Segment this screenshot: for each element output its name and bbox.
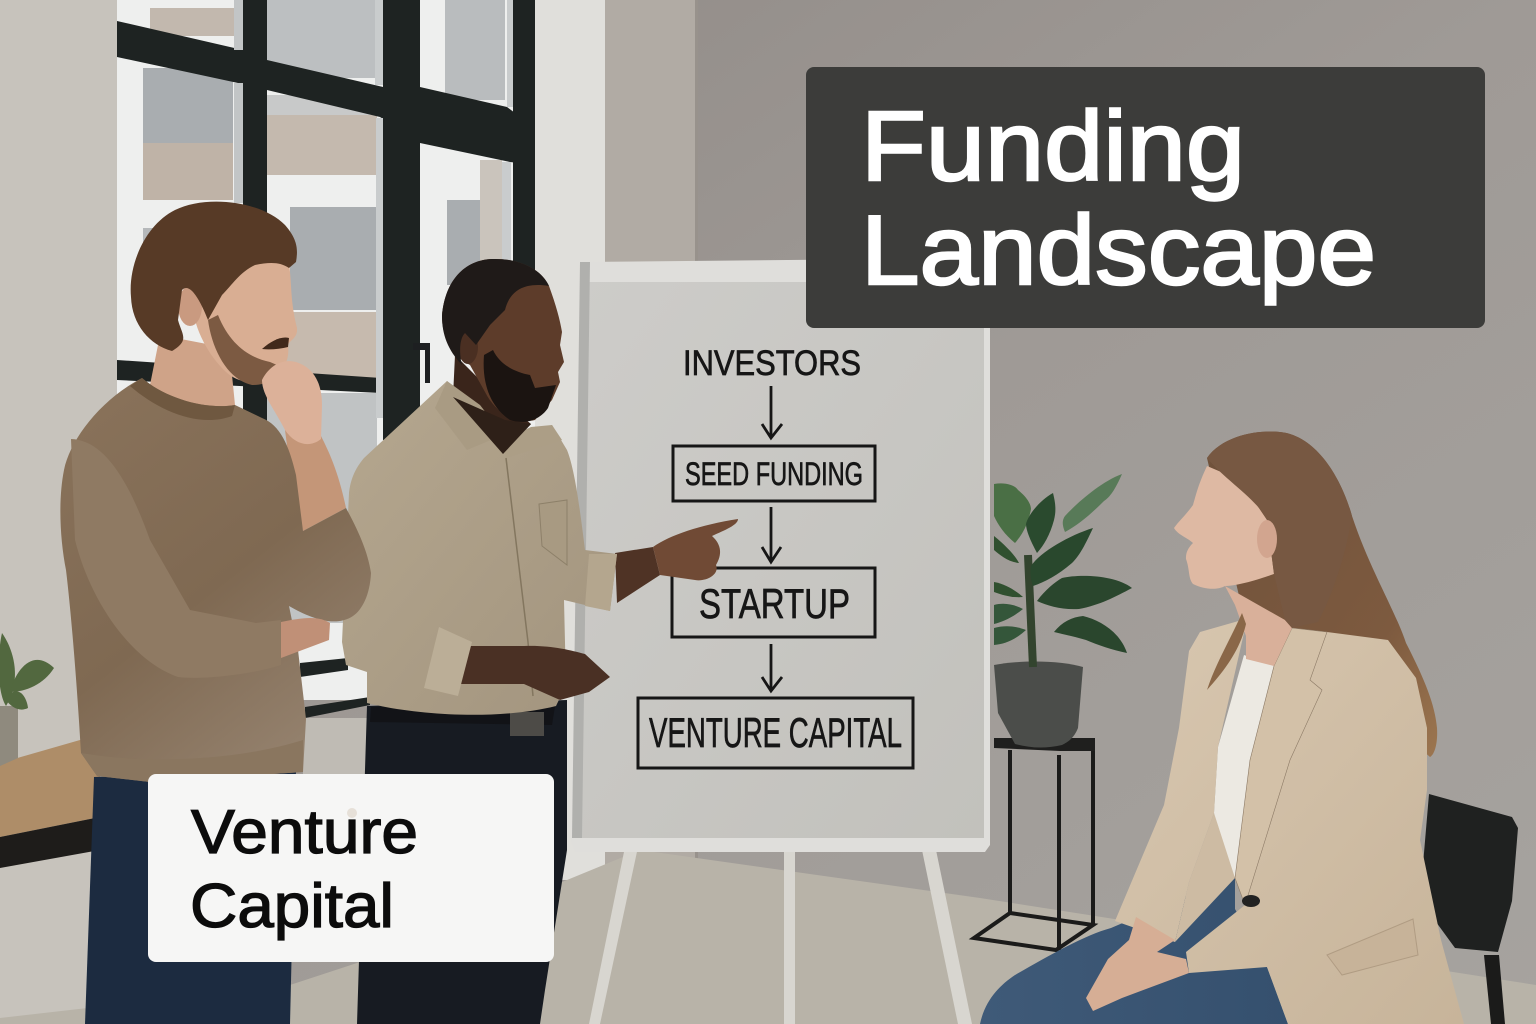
flipchart legs (589, 847, 972, 1024)
hand on chin (262, 361, 322, 444)
box: seed funding (673, 446, 875, 501)
window handle (413, 343, 430, 383)
box: seed funding: SEED FUNDING (685, 456, 863, 492)
neck (453, 355, 531, 454)
subtitle text: Capital (190, 872, 394, 941)
chair (1420, 794, 1518, 1024)
blouse (1214, 655, 1274, 878)
jeans (85, 770, 296, 1024)
sweater (60, 378, 371, 782)
plant stand (974, 745, 1093, 950)
subtitle text (190, 798, 418, 941)
neck and face (1225, 586, 1292, 666)
board (571, 258, 990, 852)
side table and small plant (0, 633, 100, 868)
hair (131, 202, 297, 351)
flipchart (571, 258, 990, 1024)
shirt (342, 381, 617, 715)
potted plant on stand (974, 474, 1132, 950)
subtitle card (148, 774, 554, 962)
person: man in sweater (60, 202, 371, 1024)
beard (208, 315, 284, 385)
crossed hand (281, 618, 330, 658)
box: startup: STARTUP (699, 580, 850, 627)
pointing forearm (615, 547, 660, 603)
blazer (1115, 620, 1464, 1024)
trousers (357, 700, 567, 1024)
arrow 2 (762, 507, 781, 562)
person: seated woman (980, 432, 1464, 1024)
pot (994, 661, 1083, 748)
box: startup (672, 568, 875, 637)
hands (1086, 917, 1189, 1011)
building outside window (143, 0, 505, 623)
lower forearm and hand (450, 646, 610, 700)
jacket button (1242, 895, 1260, 907)
window with building view (117, 0, 535, 778)
head (442, 259, 564, 421)
hair back (1207, 432, 1437, 757)
arrow 3 (762, 644, 782, 691)
placket and pocket (506, 458, 533, 696)
face (192, 258, 297, 382)
title panel (806, 67, 1485, 328)
title text: Funding (861, 91, 1245, 201)
icon: small leaves (0, 633, 54, 710)
cuffs (424, 627, 472, 696)
window frame (117, 0, 535, 718)
label: investors: INVESTORS (683, 344, 861, 383)
pointing hand fingers (653, 519, 738, 580)
raised forearm (285, 430, 346, 531)
jeans (980, 875, 1288, 1024)
box: venture capital: VENTURE CAPITAL (649, 709, 902, 756)
subtitle text: Venture (191, 798, 418, 867)
title text: Landscape (861, 195, 1376, 305)
jacket pocket (1327, 919, 1418, 975)
neck (150, 335, 235, 408)
title text (861, 91, 1376, 305)
arrow 1 (762, 386, 782, 438)
person: man in shirt (342, 259, 660, 1024)
front hair (1207, 432, 1352, 628)
flow diagram (638, 344, 913, 768)
box: venture capital (638, 698, 913, 768)
leaves (994, 474, 1132, 667)
